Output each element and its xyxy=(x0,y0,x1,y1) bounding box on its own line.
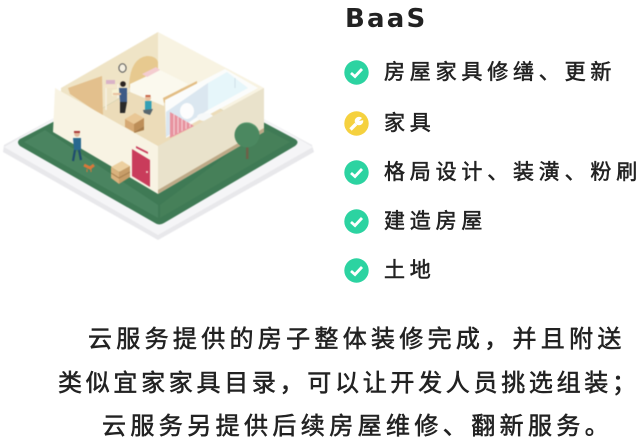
line 1: 云服务提供的房子整体装修完成，并且附送 xyxy=(88,326,626,353)
wardrobe xyxy=(68,76,103,116)
back right wall xyxy=(158,32,264,132)
label: 土地 xyxy=(384,259,436,282)
person sitting xyxy=(143,95,153,115)
label: 家具 xyxy=(384,112,436,135)
orange dog xyxy=(84,165,94,172)
list row: construction xyxy=(344,209,487,234)
description text xyxy=(58,326,640,440)
tree xyxy=(234,122,260,159)
label: 建造房屋 xyxy=(384,210,487,233)
wall clock xyxy=(119,64,126,72)
striped bath curtain xyxy=(170,112,194,138)
icon: green check xyxy=(344,258,369,283)
platform base xyxy=(3,59,314,240)
list row: layout and decoration xyxy=(344,160,640,185)
bathroom floor and walls xyxy=(165,69,258,138)
icon: yellow wrench xyxy=(344,111,369,136)
icon: green check xyxy=(344,60,369,85)
list row: furniture xyxy=(344,111,436,136)
front right wall xyxy=(158,88,264,194)
icon: green check xyxy=(344,160,369,185)
person standing xyxy=(113,81,127,113)
house floor xyxy=(61,76,264,190)
list row: land xyxy=(344,258,436,283)
moving boxes inside xyxy=(125,113,144,133)
line 3: 云服务另提供后续房屋维修、翻新服务。 xyxy=(102,413,613,440)
man walking outside xyxy=(73,131,81,161)
icon: green check xyxy=(344,209,369,234)
label: 格局设计、装潢、粉刷 xyxy=(384,161,640,184)
illustration: isometric house cutaway xyxy=(3,32,314,240)
wall foot shadow xyxy=(158,128,264,194)
front left wall xyxy=(53,88,158,194)
boxes outside xyxy=(111,161,130,184)
list row: repairs xyxy=(344,60,616,85)
shelf desk xyxy=(104,80,122,110)
green lawn xyxy=(18,60,298,224)
arched alcove xyxy=(129,56,158,88)
label: 房屋家具修缮、更新 xyxy=(384,61,616,84)
back left wall xyxy=(61,32,158,132)
red door xyxy=(132,146,150,187)
bed xyxy=(130,67,197,106)
line 2: 类似宜家家具目录，可以让开发人员挑选组装； xyxy=(58,370,640,397)
heading: BaaS: BaaS xyxy=(345,4,427,34)
